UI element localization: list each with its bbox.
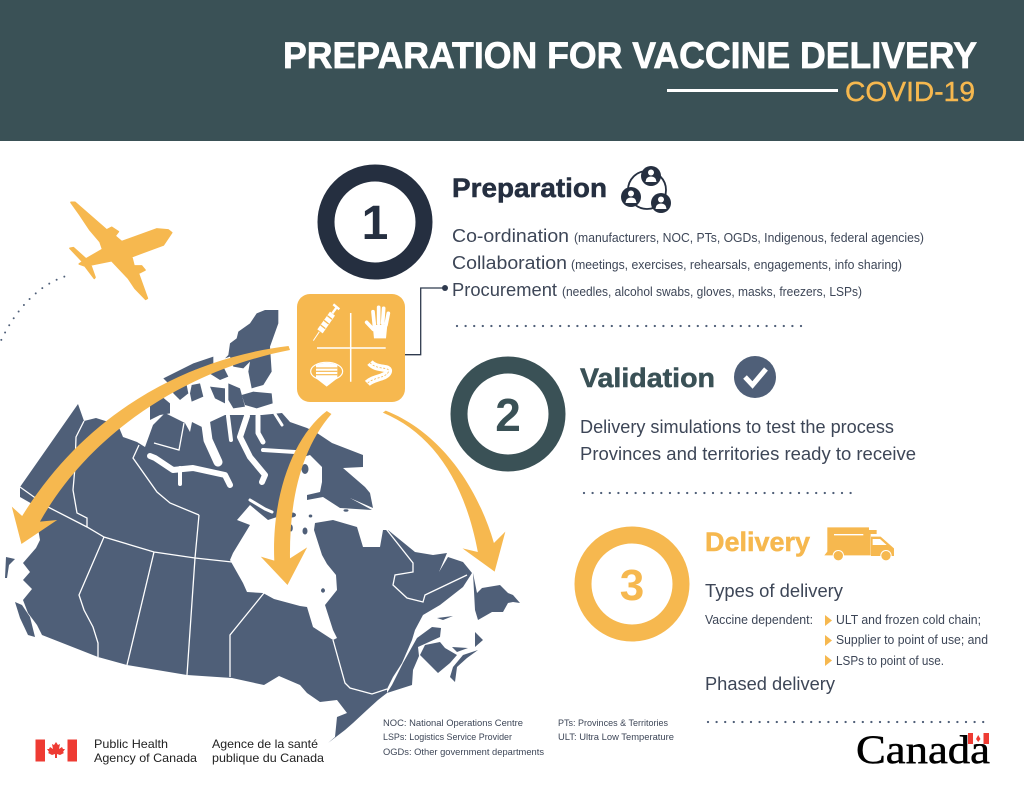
Gaspe and New Brunswick [387,627,441,693]
title: PREPARATION FOR VACCINE DELIVERY [283,35,977,76]
list: collaboration: (meetings, exercises, rehearsals, engagements, info sharing) [571,258,902,272]
Newfoundland [473,573,520,620]
number circle 1 [326,173,424,271]
islands in Hudson Strait [288,509,348,593]
Cape Breton, PEI and Anticosti [437,616,483,652]
list: co-ordination: Co-ordination [452,226,569,246]
logo: Public Health Agency of Canada: Agency of Canada [94,751,197,765]
list: collaboration [452,253,902,273]
heading: Preparation [452,173,607,203]
text: types of delivery: Types of delivery [705,581,843,601]
list: co-ordination: (manufacturers, NOC, PTs, OGDs, Indigenous, federal agencies) [574,231,924,245]
number circle 2: 2 [495,389,521,441]
step 1: preparation [326,166,924,300]
number circle 3 [583,535,681,633]
arrow: to central Canada [261,411,331,585]
step 3: delivery [583,527,988,694]
icon: glove [367,307,388,338]
header banner [0,0,1024,141]
white channels [150,414,295,512]
icon: people network [621,166,671,213]
arrows from supplies to the regions [12,346,505,585]
list: LSPs: LSPs to point of use. [836,654,944,668]
legend: abbreviations: OGDs: Other government departments [383,747,544,758]
icon: wordmark flag [968,733,989,744]
logo: Public Health Agency of Canada [36,737,324,765]
text: phased delivery: Phased delivery [705,674,835,694]
logo: Canada wordmark: Canada [856,727,990,772]
icon: check mark [734,356,776,398]
legend: abbreviations: PTs: Provinces & Territories [558,718,668,729]
subtitle: COVID-19 [845,76,975,107]
title rule [667,89,838,92]
supplies panel [297,294,405,402]
map of Canada [5,310,520,743]
provincial and territorial borders [20,421,467,694]
Nova Scotia [450,650,478,682]
icon: airplane with dotted flight path [0,202,172,343]
arrow: to west coast [12,346,290,544]
connector line [405,285,448,355]
legend: abbreviations: LSPs: Logistics Service Provider [383,732,512,743]
number circle 1: 1 [362,197,388,250]
number circle 3: 3 [620,561,644,610]
icon: road [367,363,389,383]
logo: Public Health Agency of Canada: Agence de la santé [212,737,318,751]
number circle 2 [459,365,557,463]
icon: mask [311,362,343,387]
arrow: to east coast [383,411,505,572]
icon: truck [824,527,894,561]
list: cold chain: ULT and frozen cold chain; [836,613,981,627]
icon: syringe [313,304,339,341]
text: provinces: Provinces and territories ready to receive [580,444,916,464]
legend: abbreviations [383,718,674,758]
list: procurement: Procurement [452,280,557,300]
logo: Public Health Agency of Canada: Public Health [94,737,168,751]
icon: Canadian flag [36,740,77,762]
list: co-ordination [452,226,924,246]
mainland with Baffin [20,404,472,743]
text: simulations: Delivery simulations to test the process [580,417,894,437]
text: vaccine dependent: Vaccine dependent: [705,613,813,627]
list: procurement [452,280,862,300]
Arctic islands [150,310,278,420]
list: supplier: Supplier to point of use; and [836,633,988,647]
heading: Delivery [705,527,810,557]
logo: Public Health Agency of Canada: publique du Canada [212,751,324,765]
Pacific islands [15,602,35,637]
legend: abbreviations: NOC: National Operations Centre [383,718,523,729]
list: procurement: (needles, alcohol swabs, gloves, masks, freezers, LSPs) [562,285,862,299]
heading: Validation [580,363,715,393]
legend: abbreviations: ULT: Ultra Low Temperature [558,732,674,743]
step 2: validation [459,356,916,464]
list: collaboration: Collaboration [452,253,567,273]
